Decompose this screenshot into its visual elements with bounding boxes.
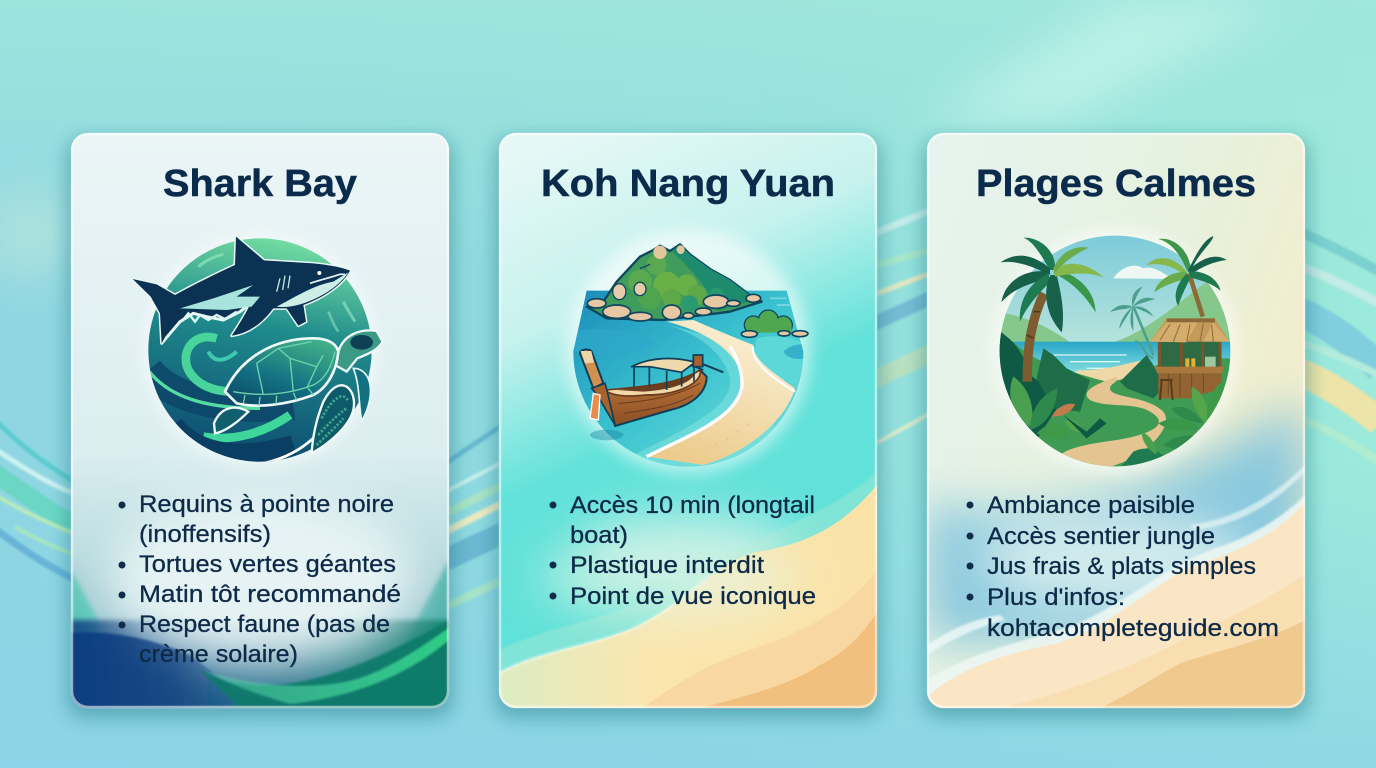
heading: Shark Bay: Shark Bay bbox=[163, 163, 357, 205]
list: Koh Nang Yuan facts bbox=[550, 492, 816, 610]
list: Shark Bay facts: (inoffensifs) bbox=[139, 521, 271, 548]
list: Shark Bay facts: crème solaire) bbox=[139, 641, 298, 668]
list: Koh Nang Yuan facts: Plastique interdit bbox=[570, 552, 764, 579]
panel: Plages Calmes bbox=[927, 133, 1305, 708]
icon: island, sandbar and longtail boat bbox=[567, 230, 810, 492]
icon: palm trees, jungle path and beach bar bbox=[993, 229, 1237, 473]
list: Koh Nang Yuan facts: Point de vue iconique bbox=[570, 583, 816, 610]
list: Plages Calmes facts: kohtacompleteguide.com bbox=[987, 615, 1279, 642]
list: Plages Calmes facts bbox=[966, 492, 1279, 642]
panel: Shark Bay bbox=[71, 133, 449, 708]
list: Koh Nang Yuan facts: boat) bbox=[570, 522, 628, 549]
list: Shark Bay facts: Requins à pointe noire bbox=[139, 491, 394, 518]
list: Plages Calmes facts: Ambiance paisible bbox=[987, 492, 1195, 519]
list: Plages Calmes facts: Jus frais & plats simples bbox=[987, 553, 1256, 580]
list: Plages Calmes facts: Plus d'infos: bbox=[987, 584, 1125, 611]
list: Plages Calmes facts: Accès sentier jungle bbox=[987, 523, 1215, 550]
heading: Koh Nang Yuan: Koh Nang Yuan bbox=[541, 163, 835, 205]
list: Shark Bay facts bbox=[118, 491, 401, 668]
card shadows bbox=[67, 138, 1309, 718]
panel: Koh Nang Yuan bbox=[499, 133, 877, 708]
icon: shark and sea turtle bbox=[133, 233, 383, 467]
heading: Plages Calmes: Plages Calmes bbox=[976, 163, 1256, 205]
list: Shark Bay facts: Matin tôt recommandé bbox=[139, 581, 401, 608]
list: Shark Bay facts: Respect faune (pas de bbox=[139, 611, 390, 638]
list: Shark Bay facts: Tortues vertes géantes bbox=[139, 551, 396, 578]
list: Koh Nang Yuan facts: Accès 10 min (longtail bbox=[570, 492, 815, 519]
